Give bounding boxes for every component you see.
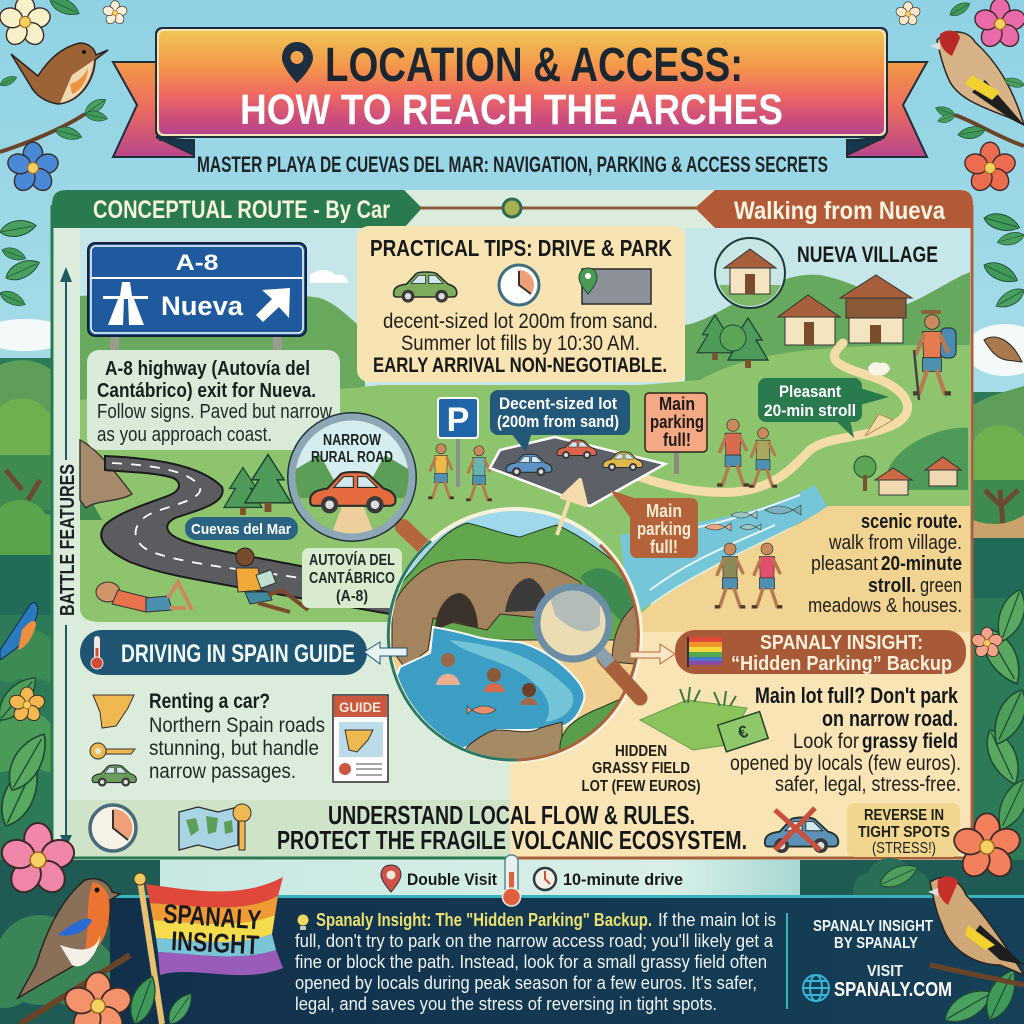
river [620, 485, 828, 620]
rainbow flag: Spanaly Insight: SPANALY [162, 899, 262, 935]
goldfinch bottom right [928, 876, 1024, 985]
rock outcrop [80, 440, 132, 508]
icon: pin and parking lot [579, 268, 651, 304]
title banner [155, 27, 888, 138]
robin and branch [18, 879, 130, 1024]
text: scenic route: meadows & houses. [808, 595, 962, 617]
icon: village badge [715, 238, 785, 310]
callout: main parking full brown [610, 490, 698, 558]
highway sign [88, 243, 306, 351]
text: scenic route: scenic route. [861, 511, 962, 533]
icon: crossed car [765, 808, 838, 853]
arrow: to spanaly insight [630, 644, 675, 664]
callout: A-8 highway directions [87, 350, 340, 450]
tab: conceptual route by car: CONCEPTUAL ROUTE - By Car [93, 196, 390, 224]
vertical side label with arrows [57, 267, 79, 848]
swimmers [441, 653, 455, 667]
badge: reverse in tight spots: TIGHT SPOTS [858, 824, 950, 841]
heading: Nueva Village: NUEVA VILLAGE [797, 242, 938, 267]
icon: rainbow flag [687, 637, 722, 667]
walkers on path [717, 419, 777, 486]
text: Spanaly insight paragraph: legal, and saves you the stress of reversing in tight spots. [295, 994, 717, 1014]
text: scenic route: walk from village. [828, 532, 962, 554]
person reading [236, 548, 308, 612]
panel: practical tips: EARLY ARRIVAL NON-NEGOTIABLE. [373, 354, 667, 377]
text: scenic route: stroll. [868, 575, 916, 597]
icon: motorway [103, 282, 148, 325]
icon: thermometer centre [502, 855, 520, 906]
footer strip dark surround [0, 858, 1024, 1024]
rainbow flag: Spanaly Insight [134, 873, 283, 1024]
stat: 10-minute drive [534, 868, 683, 890]
bottom green [559, 699, 619, 750]
icon: Spain map [93, 695, 134, 728]
flowers top-right [895, 0, 1024, 194]
trees near village [697, 315, 733, 360]
icon: clock [499, 265, 539, 305]
text: Spanaly insight paragraph: full, don't try to park on the narrow access road; you'll likely get a [295, 931, 774, 951]
icon: exit arrow [256, 288, 290, 322]
dark tree behind rock [80, 480, 102, 520]
text: renting a car [149, 690, 325, 783]
small cloud on path [868, 362, 890, 375]
text: main lot full advice: on narrow road. [822, 706, 958, 731]
sign: main parking full: full! [663, 430, 691, 450]
pill: Spanaly insight hidden parking: SPANALY INSIGHT: [760, 632, 923, 654]
callout: A-8 highway directions: Cantábrico) exit for Nueva. [97, 380, 316, 402]
arrow: to driving guide [364, 642, 407, 664]
icon: euro note: € [736, 722, 751, 743]
label: Autovía del Cantábrico: CANTÁBRICO [309, 568, 395, 587]
text: renting a car: stunning, but handle [149, 737, 319, 760]
arrow on path [865, 414, 893, 436]
people by parking sign [428, 444, 492, 500]
text: renting a car: Renting a car? [149, 690, 270, 713]
right scene: village meadow [640, 228, 970, 600]
water [388, 627, 585, 755]
magnifier: narrow rural road: NARROW [323, 432, 382, 449]
fish in river [705, 505, 801, 531]
panel: practical tips [357, 226, 685, 382]
callout: main parking full brown: parking [637, 519, 691, 539]
text: main lot full advice: Look for [793, 730, 859, 753]
tab: walking from Nueva [695, 190, 973, 228]
panel: practical tips: Summer lot fills by 10:30 AM. [401, 332, 640, 355]
text: main lot full advice [730, 683, 961, 796]
pine trees [224, 468, 262, 515]
panel: practical tips: PRACTICAL TIPS: DRIVE & PARK [370, 235, 672, 261]
arrow: lot up from cave [557, 480, 586, 535]
cave hill [395, 523, 645, 640]
flowers top-left [0, 0, 128, 194]
label: hidden grassy field lot [582, 743, 700, 795]
label: Autovía del Cantábrico: AUTOVÍA DEL [309, 550, 395, 569]
icon: guide booklet: GUIDE [339, 699, 381, 715]
flowers bottom [0, 813, 1023, 1024]
tab: conceptual route by car [52, 190, 422, 228]
left scene: highway landscape [80, 228, 690, 630]
text: Spanaly insight paragraph: If the main lot is [658, 910, 776, 930]
footer panel [110, 895, 1024, 1024]
icon: lightbulb [298, 914, 308, 930]
label: hidden grassy field lot: LOT (FEW EUROS) [582, 778, 700, 795]
text: understand local flow [277, 800, 747, 855]
icon: small car [92, 765, 136, 787]
sign: main parking full: Main [659, 394, 695, 414]
sign: main parking full: parking [650, 412, 704, 432]
label: hidden grassy field lot: GRASSY FIELD [592, 760, 690, 777]
text: Spanaly insight paragraph [295, 910, 776, 1014]
text: main lot full advice: safer, legal, stress-free. [775, 773, 961, 796]
connector with node [420, 199, 698, 217]
brand block: SPANALY INSIGHT [813, 918, 933, 935]
side landscape: left [0, 218, 75, 868]
hiker [913, 312, 956, 400]
pill: driving in Spain guide: DRIVING IN SPAIN GUIDE [121, 640, 355, 668]
text: understand local flow: PROTECT THE FRAGILE VOLCANIC ECOSYSTEM. [277, 825, 747, 855]
header ribbon tails [113, 62, 927, 157]
icon: thermometer [91, 636, 103, 669]
pill: driving in Spain guide [80, 630, 367, 675]
couple on beach [715, 543, 782, 607]
callout: pleasant stroll [758, 378, 889, 438]
wren with branch top-left [0, 43, 109, 152]
icon: map pin [282, 42, 313, 83]
text: scenic route [808, 511, 962, 617]
text: understand local flow: UNDERSTAND LOCAL FLOW & RULES. [328, 800, 695, 830]
text: Spanaly insight paragraph: Spanaly Insight: The "Hidden Parking" Backup. [316, 910, 652, 930]
label: Autovía del Cantábrico: (A-8) [336, 588, 368, 605]
panel: practical tips: decent-sized lot 200m from sand. [383, 310, 658, 333]
pill: Spanaly insight hidden parking [675, 630, 966, 675]
badge: reverse in tight spots: REVERSE IN [864, 807, 944, 824]
label: hidden grassy field lot: HIDDEN [615, 743, 667, 760]
title banner: LOCATION & ACCESS: [325, 39, 743, 92]
callout: A-8 highway directions: A-8 highway (Autovía del [105, 358, 310, 380]
text: renting a car: narrow passages. [149, 760, 296, 783]
small flowers side [8, 627, 1004, 723]
icon: clock bottom [90, 805, 136, 851]
callout: A-8 highway directions: Follow signs. Paved but narrow [97, 401, 332, 423]
goldfinch top-right with branch [930, 31, 1024, 146]
person relaxing on grass [96, 582, 192, 612]
magnifier: narrow rural road: RURAL ROAD [311, 449, 393, 466]
sign: main parking full [645, 393, 707, 474]
label: Autovía del Cantábrico [302, 548, 402, 608]
badge: reverse in tight spots [847, 803, 960, 857]
icon: guide booklet [333, 695, 388, 782]
icon: globe [803, 975, 829, 1001]
magnifier: narrow rural road [287, 412, 429, 552]
title banner: HOW TO REACH THE ARCHES [240, 86, 783, 134]
brand block [803, 918, 952, 1001]
text: scenic route: green [920, 575, 962, 597]
parking sign: P [447, 401, 469, 439]
callout: decent-sized lot: Decent-sized lot [499, 394, 617, 413]
text: main lot full advice: opened by locals (few euros). [730, 752, 961, 775]
icon: map and key [179, 804, 251, 850]
badge: reverse in tight spots: (STRESS!) [872, 840, 936, 857]
cave rock [392, 559, 583, 668]
small houses and bush [854, 428, 968, 495]
beach area [620, 506, 970, 632]
text: scenic route: pleasant [811, 553, 878, 575]
vertical side label with arrows: BATTLE FEATURES [57, 464, 79, 616]
stat: double visit [381, 865, 497, 892]
inner magnifier [536, 586, 640, 698]
cave illustration circle [387, 507, 645, 763]
callout: pleasant stroll: Pleasant [779, 382, 841, 401]
small bird right [984, 337, 1022, 362]
main panel background [52, 190, 973, 860]
winding road [101, 456, 395, 614]
label: Cuevas del Mar [185, 517, 298, 540]
brand block: BY SPANALY [834, 935, 918, 952]
highway sign: A-8 [176, 250, 218, 275]
callout: decent-sized lot [490, 390, 630, 452]
text: Spanaly insight paragraph: opened by locals during peak season for a few euros. It's safer, [295, 973, 757, 993]
text: renting a car: Northern Spain roads [149, 714, 325, 737]
divider [786, 913, 788, 1009]
text: Spanaly insight paragraph: fine or block the path. Instead, look for a small grassy field often [295, 952, 767, 972]
brand block: VISIT [867, 963, 903, 980]
highway sign: Nueva [161, 291, 244, 321]
text: scenic route: 20-minute [881, 553, 962, 575]
label: Cuevas del Mar: Cuevas del Mar [191, 521, 291, 538]
callout: A-8 highway directions: as you approach coast. [97, 424, 272, 446]
callout: decent-sized lot: (200m from sand) [497, 412, 619, 431]
rainbow flag: Spanaly Insight: INSIGHT [170, 926, 260, 960]
stat: double visit: Double Visit [407, 870, 497, 889]
callout: pleasant stroll: 20-min stroll [764, 401, 856, 420]
text: main lot full advice: Main lot full? Don't park [755, 683, 959, 708]
parking lot with cars [490, 437, 665, 506]
blue bird left [0, 603, 38, 660]
bottom rock [460, 722, 562, 760]
village houses [778, 275, 912, 345]
side landscape: right [954, 210, 1024, 868]
text: main lot full advice: grassy field [862, 730, 958, 753]
tab: walking from Nueva: Walking from Nueva [734, 197, 946, 225]
parking sign [438, 398, 478, 487]
right rock [612, 606, 637, 664]
stat: 10-minute drive: 10-minute drive [563, 870, 683, 889]
callout: main parking full brown: Main [646, 501, 682, 521]
callout: main parking full brown: full! [650, 537, 678, 557]
brand block: SPANALY.COM [834, 979, 952, 1001]
hidden grassy field [640, 687, 768, 752]
icon: key [90, 743, 135, 759]
walking path [640, 343, 908, 492]
icon: green car [394, 272, 457, 303]
pill: Spanaly insight hidden parking: “Hidden Parking” Backup [731, 653, 952, 675]
